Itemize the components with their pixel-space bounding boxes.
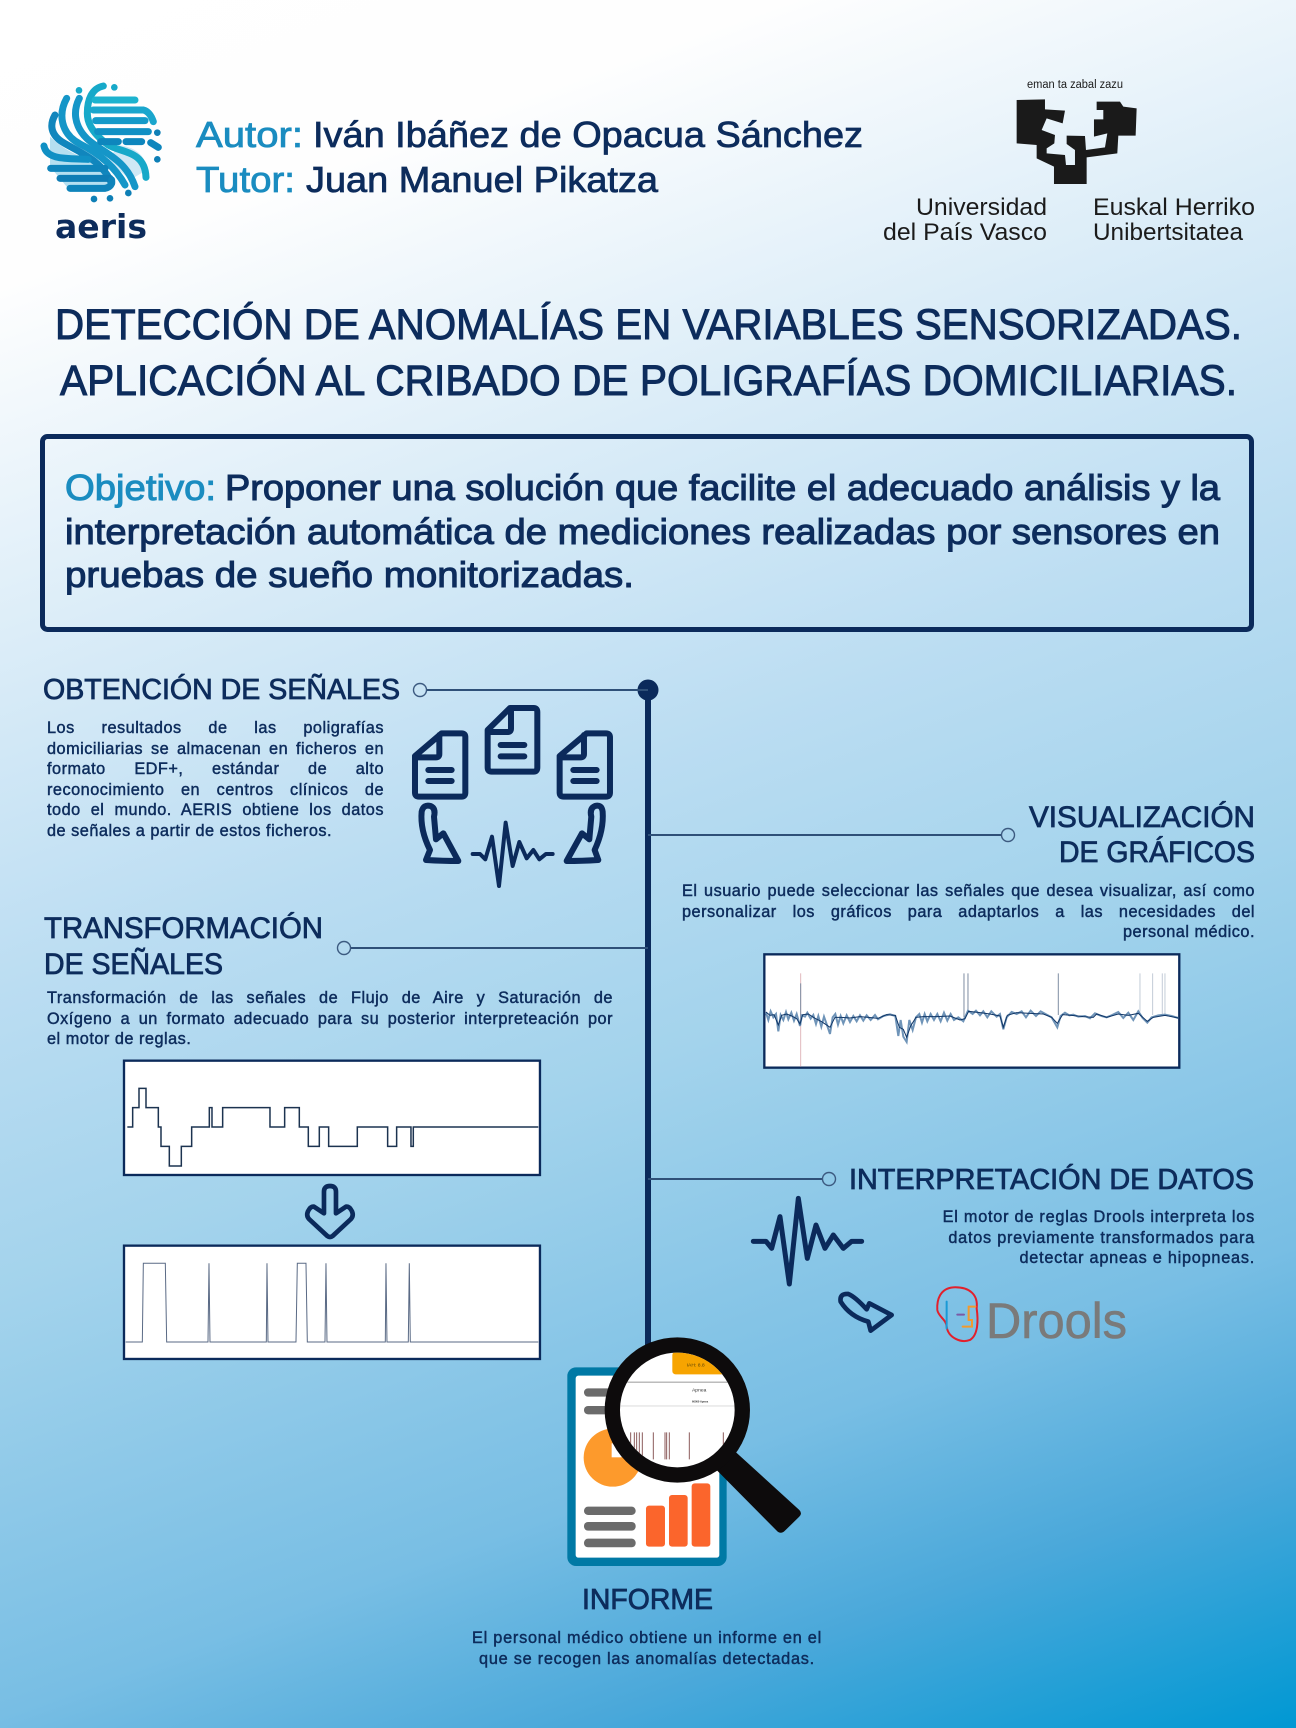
text: informe: El personal médico obtiene un informe en el <box>472 1629 822 1647</box>
text: visualización de gráficos: personalizar los gráficos para adaptarlos a las necesidades del <box>682 903 1255 921</box>
connector: interpretación <box>648 1172 836 1186</box>
heading: transformación de señales: DE SEÑALES <box>44 947 223 981</box>
heading: obtención de señales: OBTENCIÓN DE SEÑALES <box>43 674 400 706</box>
logo: Universidad del País Vasco: Euskal Herriko <box>1093 194 1255 221</box>
magnifier <box>612 1345 801 1533</box>
heading: transformación de señales <box>44 912 323 981</box>
heading: interpretación de datos: INTERPRETACIÓN DE DATOS <box>849 1163 1254 1196</box>
magnifier: Apnea <box>692 1387 707 1393</box>
text: interpretación de datos: datos previamente transformados para <box>948 1229 1255 1247</box>
logo: aeris: aeris <box>55 207 147 246</box>
title: DETECCIÓN DE ANOMALÍAS EN VARIABLES SENSORIZADAS. <box>55 301 1242 349</box>
text: visualización de gráficos: personal médico. <box>1123 923 1255 941</box>
icon: document left <box>415 733 465 797</box>
icon: document right <box>560 733 610 797</box>
title <box>55 301 1242 405</box>
text: interpretación de datos: detectar apneas e hipopneas. <box>1019 1249 1255 1267</box>
connector: visualización <box>648 828 1014 842</box>
chart: signal visualization <box>764 954 1179 1068</box>
tutor line: Juan Manuel Pikatza <box>306 159 659 200</box>
icon: pulse <box>753 1198 862 1284</box>
icon: report with magnifier <box>567 1345 801 1566</box>
panel: objetivo <box>42 436 1252 630</box>
author line: Iván Ibáñez de Opacua Sánchez <box>313 114 863 155</box>
logo: Drools: Drools <box>986 1293 1127 1349</box>
text: visualización de gráficos: El usuario puede seleccionar las señales que desea visualizar, así como <box>682 882 1255 900</box>
text: interpretación de datos <box>943 1208 1255 1267</box>
text: obtención de señales: Los resultados de las poligrafías <box>47 719 384 737</box>
text: obtención de señales: formato EDF+, estándar de alto <box>47 760 384 778</box>
heading: visualización de gráficos <box>1029 801 1255 869</box>
icon: right curved arrow <box>567 806 603 861</box>
tutor line: Tutor: <box>196 159 295 200</box>
panel: objetivo: pruebas de sueño monitorizadas. <box>65 554 634 595</box>
panel: objetivo: Proponer una solución que facilite el adecuado análisis y la <box>225 467 1221 508</box>
logo: Universidad del País Vasco <box>883 79 1255 246</box>
icon: pulse <box>473 823 553 886</box>
heading: visualización de gráficos: VISUALIZACIÓN <box>1029 801 1255 834</box>
text: obtención de señales: de señales a partir de estos ficheros. <box>47 822 332 840</box>
magnifier: IAH: 8.8 <box>687 1363 705 1369</box>
logo: Universidad del País Vasco: del País Vasco <box>883 219 1047 246</box>
arrow: down <box>307 1186 353 1237</box>
text: transformación de señales <box>47 989 613 1048</box>
text: interpretación de datos: El motor de reglas Drools interpreta los <box>943 1208 1255 1226</box>
timeline spine <box>638 680 658 1370</box>
chart: binary signal <box>124 1246 540 1359</box>
panel: objetivo: interpretación automática de mediciones realizadas por sensores en <box>65 511 1220 552</box>
report tablet <box>567 1367 727 1566</box>
magnifier: 60000 Apnea <box>692 1399 709 1403</box>
logo: aeris <box>44 84 161 246</box>
icon: documents to signal <box>415 708 610 886</box>
chart: raw signal <box>124 1061 540 1175</box>
text: transformación de señales: Oxígeno a un formato adecuado para su posterior interpreteación por <box>47 1010 613 1028</box>
text: transformación de señales: Transformación de las señales de Flujo de Aire y Saturación de <box>47 989 613 1007</box>
text: obtención de señales: reconocimiento en centros clínicos de <box>47 781 384 799</box>
text: visualización de gráficos <box>682 882 1255 941</box>
icon: left curved arrow <box>421 806 458 861</box>
text: obtención de señales <box>47 719 384 840</box>
panel: objetivo: Objetivo: <box>65 467 216 508</box>
connector: transformación <box>338 942 648 954</box>
text: obtención de señales: todo el mundo. AERIS obtiene los datos <box>47 801 384 819</box>
heading: informe: INFORME <box>582 1584 713 1616</box>
text: informe: que se recogen las anomalías detectadas. <box>479 1650 815 1668</box>
heading: transformación de señales: TRANSFORMACIÓN <box>44 912 323 945</box>
logo: Universidad del País Vasco: Universidad <box>916 194 1047 221</box>
connector: obtención <box>414 684 648 696</box>
heading: visualización de gráficos: DE GRÁFICOS <box>1059 836 1255 869</box>
logo: Universidad del País Vasco: Unibertsitatea <box>1093 219 1244 246</box>
text: transformación de señales: el motor de reglas. <box>47 1030 191 1048</box>
text: informe <box>472 1629 822 1668</box>
title: APLICACIÓN AL CRIBADO DE POLIGRAFÍAS DOMICILIARIAS. <box>60 357 1237 405</box>
arrow: curved to drools <box>840 1294 892 1331</box>
logo: Universidad del País Vasco: eman ta zabal zazu <box>1027 79 1123 91</box>
icon: document center <box>488 708 537 772</box>
author line: Autor: <box>196 114 303 155</box>
logo: Drools <box>937 1287 1127 1349</box>
text: obtención de señales: domiciliarias se almacenan en ficheros en <box>47 740 384 758</box>
